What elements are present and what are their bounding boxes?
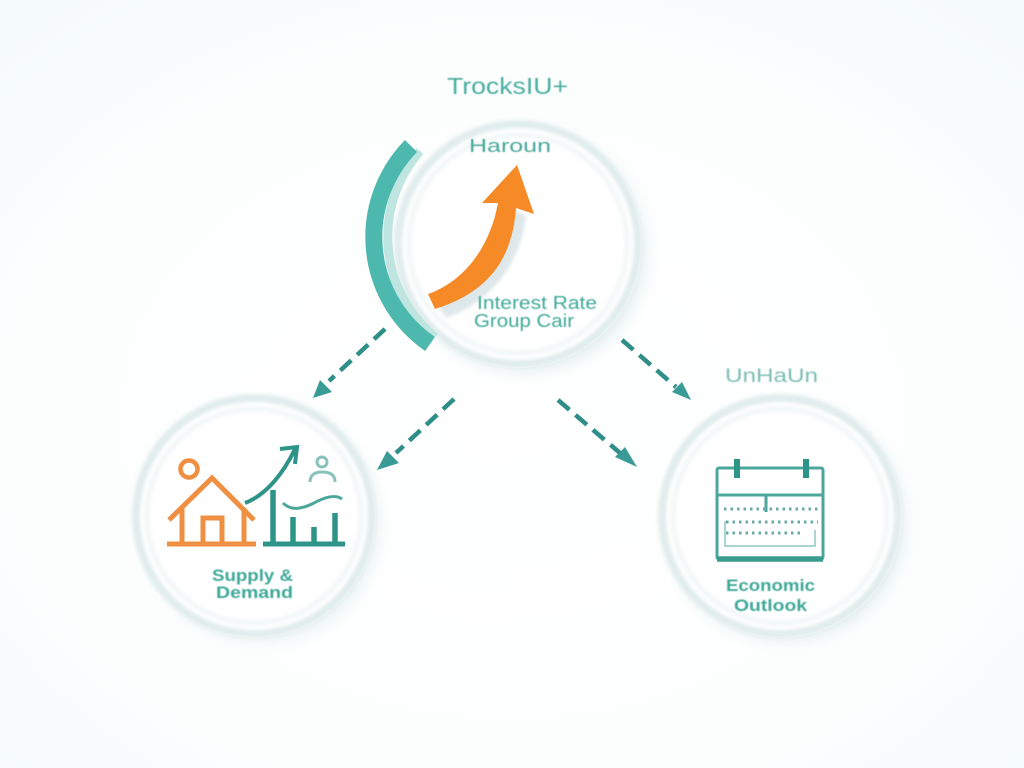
text: supply and demand label [212, 566, 293, 602]
icon: bar chart with rising arrow [245, 447, 345, 544]
icon: house and sun [167, 460, 256, 544]
arrow: top circle to economic outlook, outer [622, 340, 691, 400]
text: economic outlook label [726, 576, 815, 615]
arrow: top circle to supply and demand, outer [313, 329, 385, 398]
arrow: top circle to economic outlook, inner [558, 400, 637, 467]
text: supply and demand label: Demand [216, 583, 293, 602]
text: interest rate label: Group Cair [474, 311, 574, 331]
panel: supply and demand circle [132, 394, 379, 641]
text: economic outlook label: Outlook [734, 596, 808, 615]
panel: economic outlook circle [658, 394, 905, 641]
panel: interest rate circle [374, 120, 646, 373]
icon: calendar [717, 459, 823, 559]
heading: economic outlook top label: UnHaUn [725, 366, 818, 387]
text: supply and demand label: Supply & [212, 566, 293, 585]
text: interest rate label: Interest Rate [477, 293, 597, 313]
icon: teal arc [374, 146, 435, 344]
text: interest rate label [474, 293, 597, 331]
title: TrocksIU+ [447, 73, 568, 99]
icon: orange rising arrow [428, 165, 534, 318]
icon: person [310, 457, 335, 482]
text: economic outlook label: Economic [726, 576, 815, 595]
arrow: top circle to supply and demand, inner [377, 399, 454, 470]
heading: circle label: Haroun [469, 136, 551, 156]
